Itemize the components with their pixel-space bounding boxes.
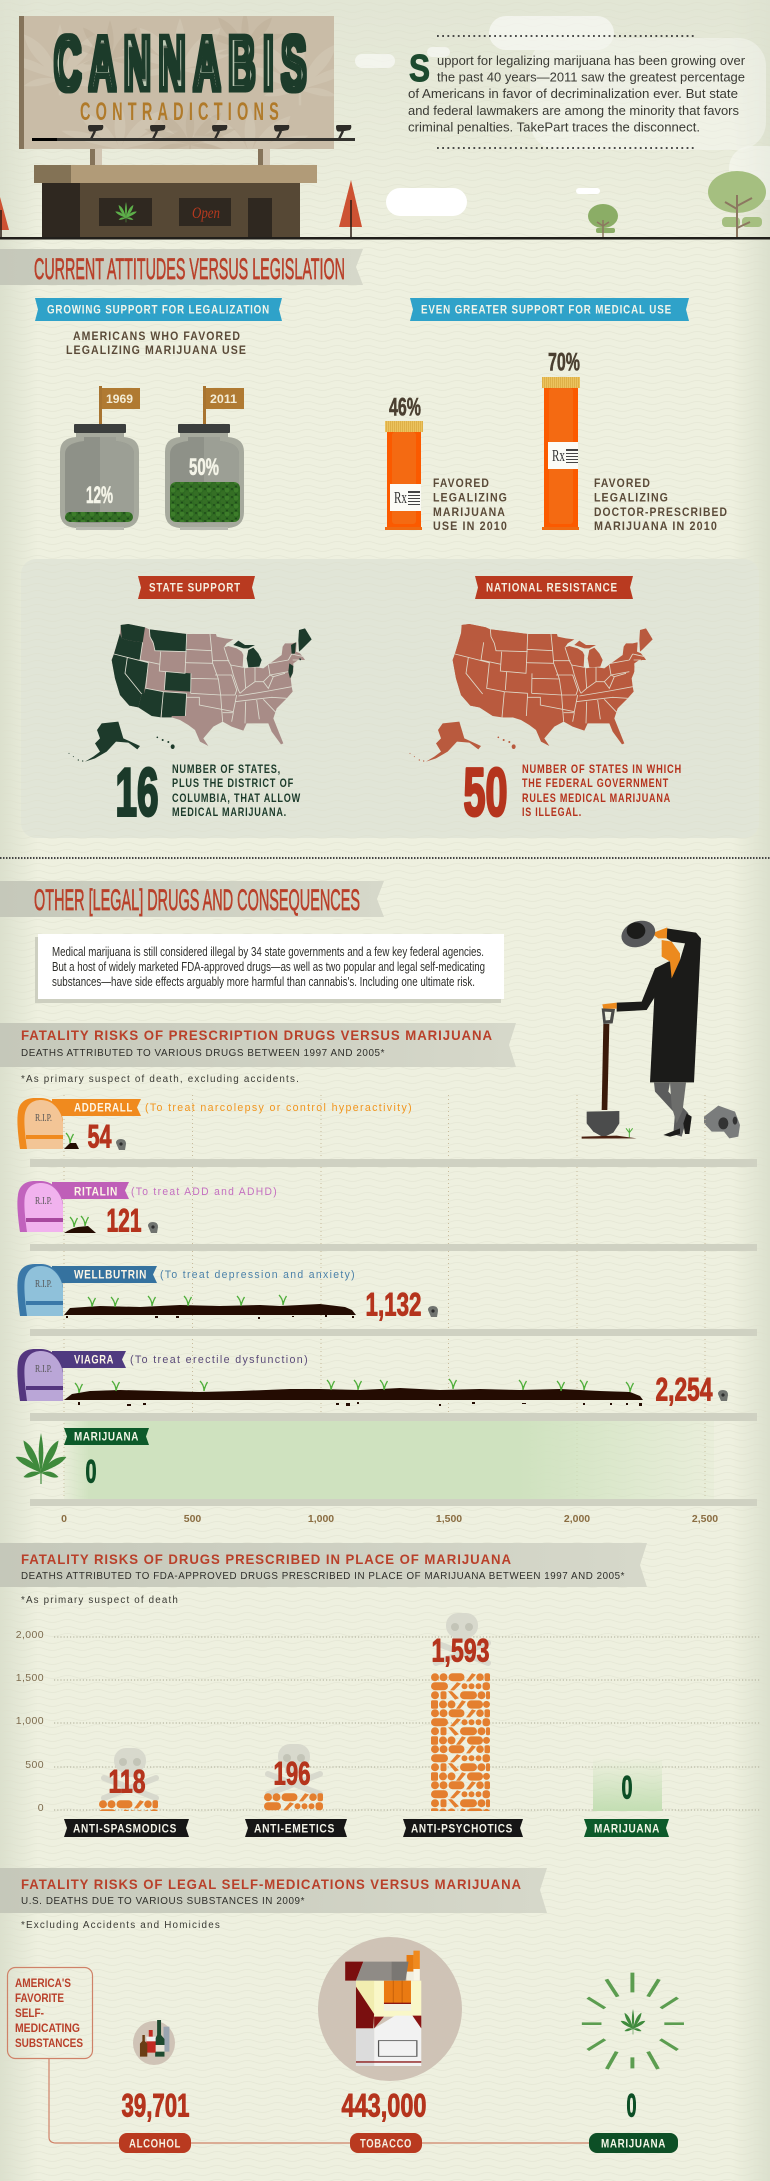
row: viagra: 2,254	[656, 1372, 713, 1408]
item: alcohol: ALCOHOL	[129, 2136, 181, 2150]
ribbon heading: GROWING SUPPORT FOR LEGALIZATION	[47, 304, 270, 316]
ribbon heading: EVEN GREATER SUPPORT FOR MEDICAL USE	[421, 304, 672, 316]
row: marijuana: MARIJUANA	[74, 1430, 139, 1444]
chart axis labels: 2,000	[564, 1513, 590, 1525]
row: adderall: ADDERALL	[74, 1100, 133, 1114]
ribbon: national resistance: NATIONAL RESISTANCE	[486, 582, 618, 594]
item: marijuana	[582, 1973, 684, 2153]
bottle caption 46%	[433, 478, 508, 533]
ribbon heading	[35, 298, 282, 321]
stat: 16 states: PLUS THE DISTRICT OF	[172, 778, 294, 790]
chart y axis labels: 1,500	[16, 1672, 44, 1684]
chart axis labels: 1,500	[436, 1513, 462, 1525]
storefront building	[34, 165, 317, 237]
drop cap: S	[409, 48, 430, 90]
chart axis labels: 500	[184, 1513, 201, 1525]
row: adderall: R.I.P.	[35, 1112, 52, 1124]
ribbon: national resistance	[475, 576, 633, 599]
bar: anti-emetics: ANTI-EMETICS	[254, 1822, 335, 1836]
bar: anti-psychotics	[403, 1613, 523, 1837]
footnote: *As primary suspect of death, excluding accidents.	[21, 1074, 300, 1085]
callout: america's favorite: AMERICA'S	[15, 1978, 71, 1990]
section heading: current attitudes: CURRENT ATTITUDES VERSUS LEGISLATION	[34, 253, 345, 286]
subheading: AMERICANS WHO FAVORED	[73, 331, 241, 343]
section heading: drugs in place of marijuana: DEATHS ATTRIBUTED TO FDA-APPROVED DRUGS PRESCRIBED IN PLACE OF MARIJUANA BETWEEN 1997 AND 2005*	[21, 1570, 625, 1582]
bar: anti-psychotics: 1,593	[432, 1632, 490, 1668]
stat: 50 states: 50	[464, 754, 508, 830]
bottle caption 70%: MARIJUANA IN 2010	[594, 521, 718, 533]
stat: 16 states: 16	[116, 754, 158, 830]
row: adderall: (To treat narcolepsy or control hyperactivity)	[145, 1102, 413, 1114]
section heading: drugs in place of marijuana	[0, 1543, 647, 1587]
bar: anti-spasmodics	[64, 1748, 189, 1837]
ribbon: state support	[138, 576, 255, 599]
jar 2011: 50%	[189, 454, 219, 481]
stat: 16 states: NUMBER OF STATES,	[172, 764, 281, 776]
stat: 16 states	[116, 754, 301, 830]
pill bottle 70%	[542, 348, 580, 530]
bar: anti-spasmodics: 118	[108, 1764, 146, 1800]
stat: 50 states	[464, 754, 682, 830]
ribbon: state support: STATE SUPPORT	[149, 582, 241, 594]
bottle caption 46%: LEGALIZING	[433, 492, 508, 504]
pill bottle 46%: 46%	[389, 394, 421, 422]
bar: anti-emetics	[245, 1744, 347, 1837]
bottle caption 70%: DOCTOR-PRESCRIBED	[594, 507, 728, 519]
subheading: LEGALIZING MARIJUANA USE	[66, 345, 247, 357]
panel: medical use	[385, 298, 728, 533]
subheading	[66, 331, 247, 357]
bar: marijuana: 0	[622, 1770, 632, 1806]
map: national resistance	[410, 624, 653, 762]
chart axis labels: 1,000	[308, 1513, 334, 1525]
pill bottle 70%: Rx	[552, 446, 565, 465]
chart y axis labels: 2,000	[16, 1629, 44, 1641]
footnote: *As primary suspect of death	[21, 1595, 179, 1606]
section heading: self-medications	[0, 1868, 547, 1913]
row: viagra: R.I.P.	[35, 1363, 52, 1375]
intro text block: and federal lawmakers are among the minority that favors	[408, 103, 739, 118]
bottle caption 46%: FAVORED	[433, 478, 490, 490]
row: adderall: 54	[88, 1118, 112, 1154]
chart axis labels	[61, 1513, 718, 1525]
section heading: other drugs	[0, 881, 384, 917]
stat: 50 states: IS ILLEGAL.	[522, 807, 582, 819]
chart axis labels: 0	[61, 1513, 67, 1525]
row: ritalin: R.I.P.	[35, 1195, 52, 1207]
text box: intro to drugs: But a host of widely marketed FDA-approved drugs—as well as two popular and legal self-medicating	[52, 960, 485, 974]
bottle caption 70%: FAVORED	[594, 478, 651, 490]
row: ritalin	[17, 1181, 278, 1238]
row: wellbutrin: R.I.P.	[35, 1278, 52, 1290]
row: wellbutrin: (To treat depression and anxiety)	[160, 1269, 356, 1281]
intro text block: criminal penalties. TakePart traces the disconnect.	[408, 120, 700, 134]
item: marijuana: 0	[626, 2088, 636, 2124]
icon: store window leaf	[115, 202, 137, 222]
section heading: self-medications: FATALITY RISKS OF LEGAL SELF-MEDICATIONS VERSUS MARIJUANA	[21, 1876, 522, 1892]
row: ritalin: RITALIN	[74, 1184, 118, 1198]
row: marijuana: 0	[86, 1454, 96, 1490]
clouds	[355, 16, 770, 200]
section heading: prescription drugs: DEATHS ATTRIBUTED TO VARIOUS DRUGS BETWEEN 1997 AND 2005*	[21, 1047, 385, 1059]
bottle caption 70%: LEGALIZING	[594, 492, 669, 504]
section heading: other drugs: OTHER [LEGAL] DRUGS AND CONSEQUENCES	[34, 884, 360, 917]
bar: marijuana: MARIJUANA	[594, 1822, 660, 1836]
section heading: current attitudes	[0, 249, 363, 286]
item: marijuana: MARIJUANA	[601, 2136, 666, 2150]
section heading: prescription drugs: FATALITY RISKS OF PRESCRIPTION DRUGS VERSUS MARIJUANA	[21, 1027, 493, 1043]
item: tobacco	[318, 1937, 462, 2153]
chart y axis labels: 0	[38, 1802, 44, 1814]
pill bottle 46%: Rx	[394, 488, 407, 507]
row: wellbutrin: WELLBUTRIN	[74, 1268, 147, 1282]
billboard lamps and rail	[32, 125, 355, 141]
bar: marijuana	[584, 1757, 669, 1837]
jar 2011	[165, 386, 244, 530]
text box: intro to drugs: Medical marijuana is still considered illegal by 34 state governments and a few key federal agencies.	[52, 945, 484, 959]
open sign: Open	[192, 205, 220, 222]
stat: 50 states: RULES MEDICAL MARIJUANA	[522, 793, 671, 805]
stat: 50 states: THE FEDERAL GOVERNMENT	[522, 778, 669, 790]
jar 1969: 1969	[106, 394, 133, 406]
stat: 50 states: NUMBER OF STATES IN WHICH	[522, 764, 682, 776]
jar 1969: 12%	[86, 482, 113, 509]
bar chart: drugs in place of marijuana	[16, 1613, 761, 1837]
bottle caption 46%: USE IN 2010	[433, 521, 508, 533]
footnote: *Excluding Accidents and Homicides	[21, 1920, 221, 1931]
text box: intro to drugs	[35, 934, 504, 1003]
stat: 16 states: MEDICAL MARIJUANA.	[172, 807, 287, 819]
bottle caption 46%: MARIJUANA	[433, 507, 506, 519]
row: ritalin: (To treat ADD and ADHD)	[131, 1186, 278, 1198]
section heading: self-medications: U.S. DEATHS DUE TO VARIOUS SUBSTANCES IN 2009*	[21, 1895, 305, 1907]
section heading: drugs in place of marijuana: FATALITY RISKS OF DRUGS PRESCRIBED IN PLACE OF MARIJUANA	[21, 1551, 512, 1567]
intro text block: the past 40 years—2011 saw the greatest percentage	[437, 70, 745, 84]
row: ritalin: 121	[106, 1202, 142, 1238]
bottle caption 70%	[594, 478, 728, 533]
bar: anti-psychotics: ANTI-PSYCHOTICS	[411, 1822, 513, 1836]
chart y axis labels: 1,000	[16, 1715, 44, 1727]
billboard	[8, 10, 355, 168]
callout: america's favorite	[8, 1968, 92, 2058]
chart axis labels: 2,500	[692, 1513, 718, 1525]
intro text block	[408, 36, 746, 148]
text box: intro to drugs: substances—have side effects arguably more harmful than cannabis's. Including one ultimate risk.	[52, 975, 475, 989]
cloud: lower white	[386, 188, 600, 216]
row: viagra: VIAGRA	[74, 1352, 114, 1366]
row: marijuana	[16, 1421, 714, 1499]
panel: growing support	[35, 298, 282, 530]
row: adderall	[17, 1098, 413, 1154]
ribbon heading	[410, 298, 689, 321]
stat: 16 states: COLUMBIA, THAT ALLOW	[172, 793, 301, 805]
row: viagra: (To treat erectile dysfunction)	[130, 1354, 309, 1366]
item: tobacco: TOBACCO	[360, 2136, 412, 2150]
pill bottle 46%	[385, 394, 423, 530]
row: viagra	[17, 1349, 728, 1408]
bar chart: prescription deaths	[16, 1095, 757, 1525]
icon: leaf burst	[582, 1973, 684, 2069]
pill bottle 70%: 70%	[548, 348, 580, 376]
trees and ground	[0, 171, 770, 240]
chart y axis labels: 500	[25, 1759, 44, 1771]
callout: america's favorite: MEDICATING	[15, 2023, 80, 2035]
bar: anti-emetics: 196	[274, 1756, 310, 1792]
section heading: prescription drugs	[0, 1023, 516, 1067]
billboard subtitle: CONTRADICTIONS	[80, 98, 284, 126]
jar 1969	[60, 386, 140, 530]
item: alcohol	[119, 2020, 191, 2153]
map: state support	[69, 624, 312, 762]
item: tobacco: 443,000	[342, 2088, 426, 2124]
chart y axis labels	[16, 1629, 44, 1814]
billboard: CANNABIS	[54, 19, 314, 107]
callout: america's favorite: SUBSTANCES	[15, 2038, 83, 2050]
icon: bottles	[140, 2020, 169, 2057]
row: wellbutrin: 1,132	[366, 1286, 422, 1322]
icon: cigarette pack	[345, 1951, 421, 2066]
row: wellbutrin	[17, 1264, 438, 1322]
jar 2011: 2011	[210, 394, 238, 406]
callout: america's favorite: SELF-	[15, 2008, 44, 2020]
callout: america's favorite: FAVORITE	[15, 1993, 64, 2005]
illustration: mourner with shovel	[582, 916, 740, 1139]
panel: state versus national	[21, 559, 759, 838]
bar: anti-spasmodics: ANTI-SPASMODICS	[73, 1822, 177, 1836]
intro text block: upport for legalizing marijuana has been growing over	[437, 53, 746, 68]
item: alcohol: 39,701	[122, 2088, 190, 2124]
connector line	[49, 2058, 589, 2143]
intro text block: of Americans in favor of decriminalization ever. But state	[408, 86, 738, 101]
